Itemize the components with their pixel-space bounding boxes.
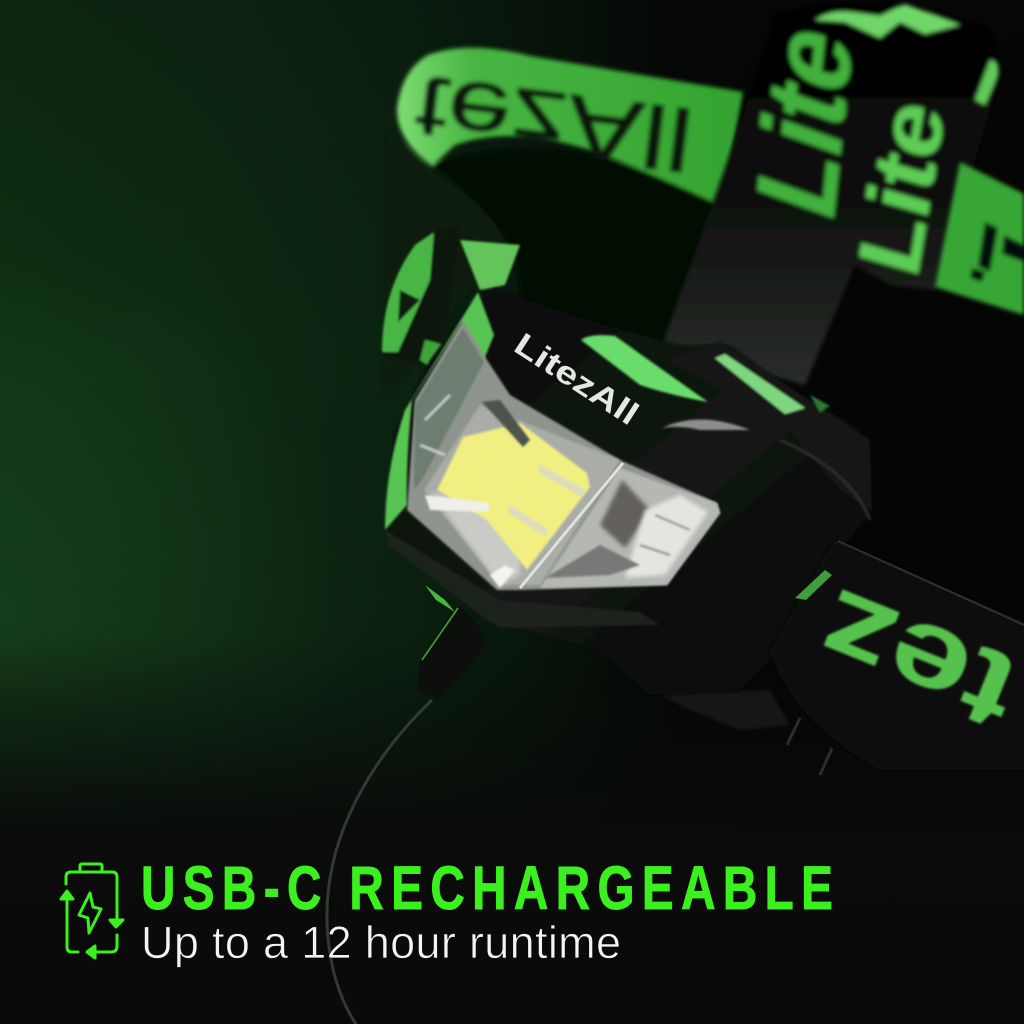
rear headband loop [385,48,743,400]
green button [581,335,708,402]
green side trim [385,292,494,530]
right reflector [540,468,720,588]
COB LED panel [437,423,590,570]
green band with flipped logo: tezAll [410,57,698,189]
lens [407,320,720,590]
lower left band pieces [382,228,520,368]
USB-C connector and cable [327,585,490,1024]
subheading: Up to a 12 hour runtime [141,917,621,968]
right band segment [935,162,1024,315]
side clip [662,342,872,520]
front strap with logo [770,540,1024,770]
headlamp [385,288,872,695]
green band with flipped logo [397,48,743,206]
battery recharge icon [61,864,123,958]
logo on lamp: LitezAll [508,326,645,432]
lamp body [385,288,872,695]
heading: USB-C RECHARGEABLE [141,853,833,922]
vertical strap with Litez logo: Lite [734,7,876,234]
vertical strap with Litez logo: Lite [840,88,963,285]
lower lamp shadow detail [660,690,832,775]
vertical strap with Litez logo [662,3,999,385]
